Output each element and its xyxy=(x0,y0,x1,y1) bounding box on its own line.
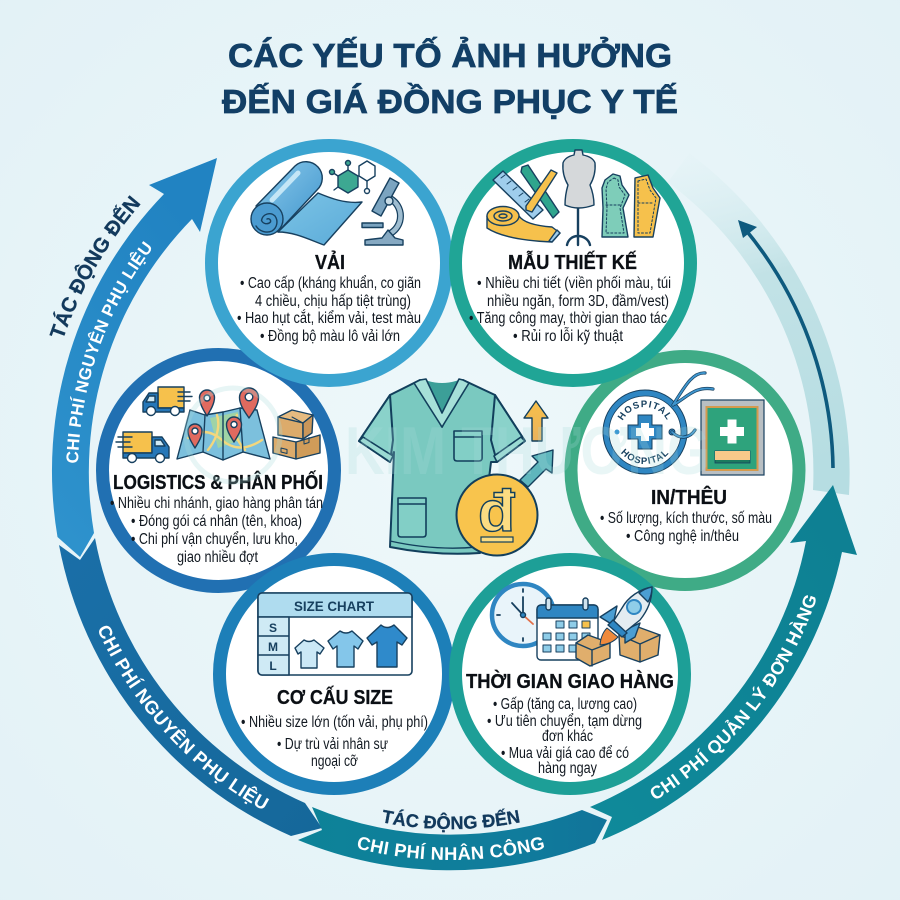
title xyxy=(222,36,678,120)
icon: molecule xyxy=(330,160,375,194)
title: ĐẾN GIÁ ĐỒNG PHỤC Y TẾ xyxy=(222,83,678,120)
text block: • Nhiều size lớn (tốn vải, phụ phí) xyxy=(241,714,428,731)
watermark xyxy=(186,388,710,489)
arrow: teal bottom segment, chi phí nhân công xyxy=(298,807,607,870)
heading: VẢI xyxy=(315,251,345,274)
text block: • Mua vải giá cao để có xyxy=(501,745,629,762)
text block xyxy=(600,510,772,545)
text block xyxy=(110,495,323,566)
text block: • Ưu tiên chuyển, tạm dừng xyxy=(487,713,642,730)
text block: • Đồng bộ màu lô vải lớn xyxy=(260,328,400,345)
icon: dong coin xyxy=(456,474,538,556)
text block: • Chi phí vận chuyển, lưu kho, xyxy=(131,531,298,548)
arrow: blue arrow, chi phí nguyên phụ liệu: CHI PHÍ NGUYÊN PHỤ LIỆU xyxy=(66,241,152,463)
heading: LOGISTICS & PHÂN PHỐI xyxy=(113,470,323,494)
text block: • Gấp (tăng ca, lương cao) xyxy=(493,696,637,713)
icon: size chart: M xyxy=(268,640,278,654)
watermark: KIM THƯƠNG xyxy=(345,413,710,489)
text block: ngoại cỡ xyxy=(311,753,358,770)
text block: hàng ngay xyxy=(538,760,597,777)
panel: thời gian giao hàng xyxy=(456,560,684,788)
text block: • Rủi ro lỗi kỹ thuật xyxy=(513,328,624,345)
text block: • Đóng gói cá nhân (tên, khoa) xyxy=(131,513,302,530)
arrow: large teal arrow, chi phí quản lý đơn hàng: CHI PHÍ QUẢN LÝ ĐƠN HÀNG xyxy=(650,595,816,798)
icon: fabric roll xyxy=(251,162,362,245)
icon: small shirt xyxy=(295,640,324,668)
icon: yellow pattern piece xyxy=(634,175,660,237)
icon: large shirt xyxy=(367,625,407,667)
central illustration: scrub shirt with price increase xyxy=(359,379,553,556)
icon: scrub shirt xyxy=(359,379,525,554)
heading: THỜI GIAN GIAO HÀNG xyxy=(466,669,674,693)
icon: yellow up arrow xyxy=(524,401,548,441)
heading: CƠ CẤU SIZE xyxy=(277,686,393,709)
arrow: blue arrow, chi phí nguyên phụ liệu xyxy=(52,158,217,557)
icon: trucks, map and boxes xyxy=(116,387,320,462)
text block: • Cao cấp (kháng khuẩn, co giãn xyxy=(240,275,421,292)
text block: đơn khác xyxy=(542,728,593,745)
text block: • Số lượng, kích thước, số màu xyxy=(600,510,772,527)
icon: size chart xyxy=(258,593,412,675)
icon: hospital embroidery badge xyxy=(602,371,715,474)
icon: size chart: S xyxy=(269,621,277,635)
panel: vải xyxy=(212,146,446,380)
title: CÁC YẾU TỐ ẢNH HƯỞNG xyxy=(228,36,672,74)
icon: microscope xyxy=(362,178,403,245)
heading: IN/THÊU xyxy=(651,485,727,509)
icon: medium shirt xyxy=(328,631,363,667)
icon: rocket xyxy=(600,587,652,645)
icon: size chart: SIZE CHART xyxy=(294,598,374,614)
icon: mannequin xyxy=(563,150,595,245)
icon: teal diagonal arrow xyxy=(520,450,553,487)
arrow: dark blue segment, chi phí nguyên phụ liệu xyxy=(59,538,322,836)
panel: logistics & phân phối xyxy=(102,354,334,586)
text block: • Tăng công may, thời gian thao tác xyxy=(469,310,667,327)
arrow: large teal arrow, chi phí quản lý đơn hàng xyxy=(590,485,857,840)
text block xyxy=(241,714,428,770)
text block: • Nhiều chi tiết (viền phối màu, túi xyxy=(477,275,671,292)
label: tác động đến, bottom: TÁC ĐỘNG ĐẾN xyxy=(383,808,520,832)
icon: teal pattern piece xyxy=(602,174,629,237)
text block xyxy=(237,275,421,345)
icon: dong coin: đ xyxy=(478,479,516,544)
panel: cơ cấu size xyxy=(220,560,448,788)
text block: • Hao hụt cắt, kiểm vải, test màu xyxy=(237,310,421,327)
text block: giao nhiều đợt xyxy=(177,549,259,566)
icon: calendar xyxy=(537,598,598,660)
text block: • Dự trù vải nhân sự xyxy=(277,736,388,753)
text block: • Nhiều chi nhánh, giao hàng phân tán xyxy=(110,495,323,512)
heading: MẪU THIẾT KẾ xyxy=(508,251,637,274)
arrow: teal bottom segment, chi phí nhân công: CHI PHÍ NHÂN CÔNG xyxy=(358,837,544,860)
arrow: thin navy arrow inside faded arc xyxy=(738,220,833,468)
text block: 4 chiều, chịu hấp tiệt trùng) xyxy=(255,293,411,310)
text block: • Công nghệ in/thêu xyxy=(626,528,739,545)
icon: embroidered green patch xyxy=(701,400,764,475)
panel: mẫu thiết kế xyxy=(456,146,690,380)
icon: size chart: L xyxy=(269,659,277,673)
panel: in/thêu xyxy=(564,350,806,591)
icon: hospital embroidery badge: HOSPITAL xyxy=(621,448,669,464)
icon: boxes xyxy=(576,627,660,666)
text block: nhiều ngăn, form 3D, đầm/vest) xyxy=(487,293,669,310)
label: tác động đến, left: TÁC ĐỘNG ĐẾN xyxy=(49,195,140,336)
arrow: faded return arc at top right xyxy=(668,153,850,495)
text block xyxy=(487,696,642,777)
arrow: dark blue segment, chi phí nguyên phụ liệu: CHI PHÍ NGUYÊN PHỤ LIỆU xyxy=(99,626,270,808)
icon: tape, ruler and pens xyxy=(487,165,560,242)
icon: hospital embroidery badge: HOSPITAL xyxy=(618,400,670,420)
icon: clock xyxy=(492,584,554,646)
text block xyxy=(469,275,671,345)
